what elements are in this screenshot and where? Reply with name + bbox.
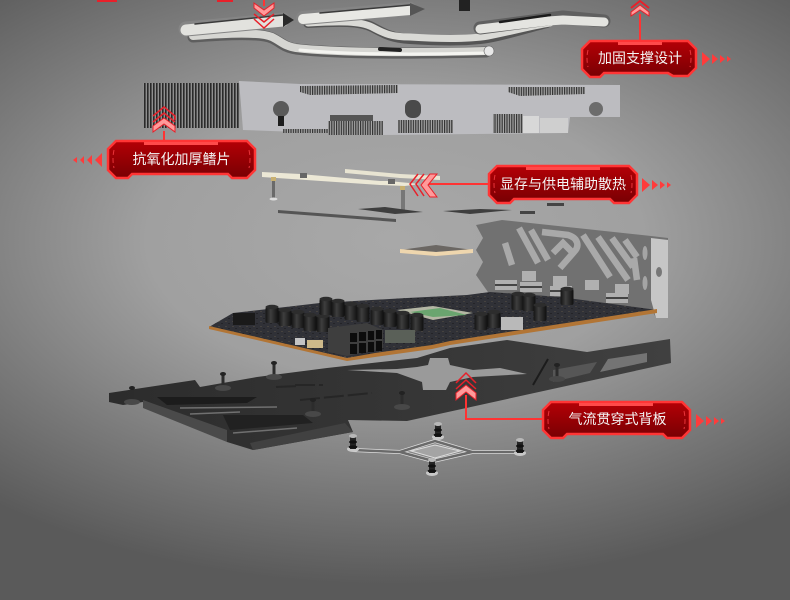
backplate	[109, 339, 671, 450]
badge	[489, 166, 637, 203]
board copper edge	[209, 309, 657, 361]
plate vents	[553, 362, 597, 382]
callout: airflow backplate: 气流贯穿式背板	[568, 411, 666, 427]
gpu die	[397, 306, 473, 320]
arrows	[73, 153, 102, 167]
heat pipes	[186, 3, 604, 56]
icon: top chevrons on heat pipe	[254, 0, 274, 28]
icon: cropped top markers	[97, 0, 470, 11]
badge	[543, 402, 690, 438]
callout: oxidised thick fins: 抗氧化加厚鳍片	[132, 151, 230, 167]
thermal pads and plates	[262, 165, 564, 222]
board	[209, 292, 657, 358]
silver fin body	[239, 81, 620, 135]
chevrons	[631, 1, 649, 16]
striped fin block	[143, 83, 239, 128]
x bracket	[347, 422, 526, 476]
callout: reinforced support design: 加固支撑设计	[598, 50, 682, 66]
chevrons	[410, 174, 437, 197]
callout: oxidised thick fins	[73, 107, 255, 178]
callout: memory and power assist cooling	[410, 166, 671, 203]
pointer line	[639, 14, 641, 41]
callout: reinforced support design	[582, 1, 731, 77]
plate notch	[347, 358, 527, 390]
callout: memory and power assist cooling: 显存与供电辅助散热	[500, 176, 626, 192]
chevrons	[456, 373, 476, 400]
chevrons	[153, 107, 175, 132]
arrows	[696, 414, 725, 428]
io ports	[495, 271, 629, 303]
standoffs	[124, 361, 565, 417]
badge	[108, 141, 255, 178]
copper die pad	[400, 245, 473, 256]
io bracket	[476, 220, 668, 318]
badge	[582, 41, 696, 77]
arrows	[642, 178, 671, 192]
heatsink fin stack	[143, 81, 620, 135]
capacitors	[266, 287, 574, 332]
graphics card pcb	[209, 271, 657, 361]
arrows	[702, 52, 731, 66]
power connector	[328, 323, 383, 356]
callout: airflow backplate	[456, 373, 725, 438]
